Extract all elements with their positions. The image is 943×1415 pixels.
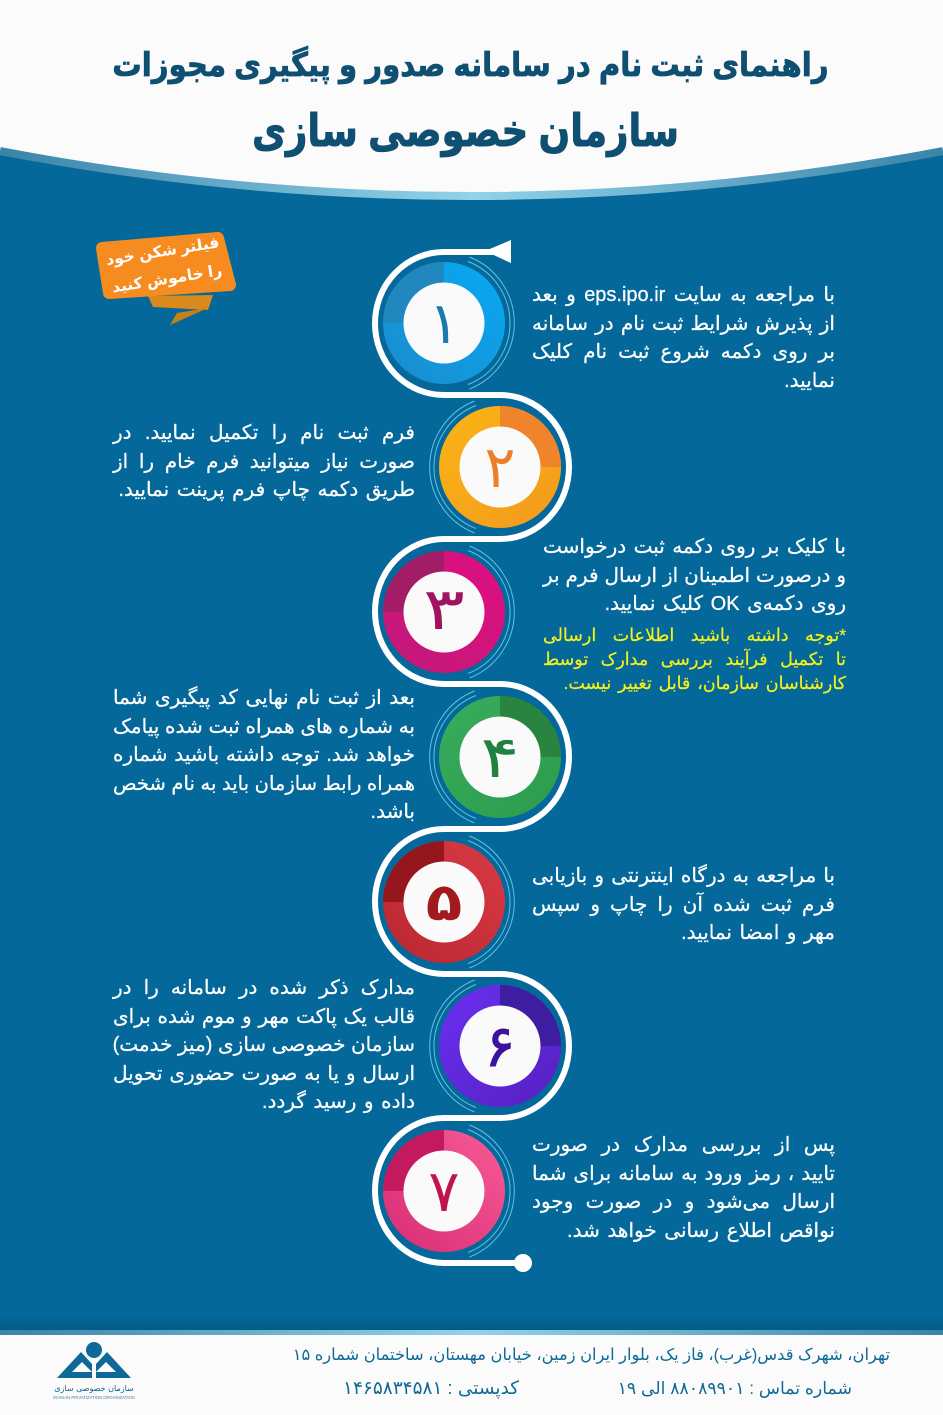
step 5 text: مهر و امضا نمایید. — [681, 922, 835, 944]
step 7 circle: ۷ — [428, 1157, 460, 1225]
step 7 text: ارسال می‌شود و در صورت وجود — [532, 1191, 835, 1213]
step 3 text: و درصورت اطمینان از ارسال فرم بر — [543, 564, 846, 586]
step 3 yellow note: کارشناسان سازمان، قابل تغییر نیست. — [564, 673, 846, 693]
step 1 text: با مراجعه به سایت eps.ipo.ir و بعد — [532, 284, 835, 306]
organization logo — [53, 1342, 135, 1400]
step 1 circle — [383, 257, 514, 389]
step 4 text: همراه رابط سازمان باید به نام شخص — [113, 772, 415, 794]
step 2 circle: ۲ — [484, 433, 516, 501]
ribbon text: را خاموش کنید — [111, 262, 223, 296]
step 6 text: داده و رسید گردد. — [262, 1091, 415, 1113]
step 6 circle — [430, 980, 561, 1112]
step 3 circle: ۳ — [423, 576, 465, 643]
step 4 text — [113, 686, 415, 823]
step 6 text: مدارک ذکر شده در سامانه را در — [113, 977, 415, 999]
step 2 text — [112, 422, 415, 502]
step 2 text: فرم ثبت نام را تکمیل نمایید. در — [113, 422, 415, 444]
step 4 text: بعد از ثبت نام نهایی کد پیگیری شما — [113, 687, 415, 709]
step 1 circle: ۱ — [428, 289, 460, 357]
step 5 text: با مراجعه به درگاه اینترنتی و بازیابی — [532, 865, 835, 887]
footer postal code: کدپستی : ۱۴۶۵۸۳۴۵۸۱ — [343, 1377, 519, 1398]
step 1 text — [532, 284, 835, 392]
step 5 text: فرم ثبت شده آن را چاپ و سپس — [532, 894, 835, 916]
step 5 circle: ۵ — [426, 873, 462, 933]
organization logo: IRANIAN PRIVATIZATION ORGANIZATION — [53, 1395, 135, 1400]
step 3 yellow note: تا تکمیل فرآیند بررسی مدارک توسط — [543, 649, 846, 669]
step 4 text: باشد. — [371, 801, 415, 823]
step 6 text: سازمان خصوصی سازی (میز خدمت) — [113, 1034, 415, 1056]
step 6 text: ارسال و یا به صورت حضوری تحویل — [113, 1062, 415, 1084]
step 2 text: صورت نیاز میتوانید فرم خام را از — [113, 450, 415, 472]
step 1 text: از پذیرش شرایط ثبت نام در سامانه — [532, 312, 835, 334]
step 4 circle — [430, 691, 561, 823]
step 6 text — [112, 977, 415, 1114]
ribbon callout shape — [102, 238, 230, 325]
title line 2: سازمان خصوصی سازی — [252, 105, 679, 156]
road start arrow — [485, 240, 511, 263]
step 3 text: با کلیک بر روی دکمه ثبت درخواست — [543, 536, 846, 558]
footer phone: شماره تماس : ۸۸۰۸۹۹۰۱ الی ۱۹ — [618, 1378, 852, 1398]
step 3 text — [542, 536, 846, 616]
organization logo: سازمان خصوصی سازی — [54, 1384, 134, 1393]
step 7 text: پس از بررسی مدارک در صورت — [532, 1134, 835, 1156]
step 2 text: طریق دکمه چاپ فرم پرینت نمایید. — [118, 479, 415, 501]
step 7 text — [532, 1134, 835, 1242]
step 3 circle — [383, 546, 514, 678]
step 7 circle — [383, 1125, 514, 1257]
step 7 text: تایید ، رمز ورود به سامانه برای شما — [532, 1162, 835, 1184]
step 3 yellow note: *توجه داشته باشید اطلاعات ارسالی — [543, 625, 846, 645]
step 5 circle — [383, 836, 514, 968]
step 1 text: بر روی دکمه شروع ثبت نام کلیک — [532, 341, 835, 363]
step 6 text: قالب یک پاکت مهر و موم شده برای — [113, 1006, 415, 1028]
step 3 text: روی دکمه‌ی OK کلیک نمایید. — [605, 593, 846, 615]
step 5 text — [532, 864, 835, 944]
ribbon text: فیلتر شکن خود — [105, 234, 221, 269]
step 2 circle — [430, 401, 561, 533]
road end dot — [514, 1254, 532, 1272]
footer panel — [0, 1315, 943, 1415]
header white curve — [0, 0, 943, 196]
step 3 yellow note — [543, 625, 846, 694]
step 4 text: به شماره های همراه ثبت شده پیامک — [113, 716, 415, 738]
step 4 text: خواهد شد. توجه داشته باشید شماره — [113, 744, 415, 766]
winding road line — [375, 252, 569, 1263]
ribbon text — [105, 234, 223, 296]
step 6 circle: ۶ — [484, 1012, 516, 1080]
step 4 circle: ۴ — [481, 724, 519, 791]
step 1 text: نمایید. — [784, 370, 835, 392]
title line 1: راهنمای ثبت نام در سامانه صدور و پیگیری مجوزات — [112, 46, 829, 83]
step 7 text: نواقص اطلاع رسانی خواهد شد. — [567, 1220, 835, 1242]
footer address: تهران، شهرک قدس(غرب)، فاز یک، بلوار ایران زمین، خیابان مهستان، ساختمان شماره ۱۵ — [293, 1346, 890, 1364]
